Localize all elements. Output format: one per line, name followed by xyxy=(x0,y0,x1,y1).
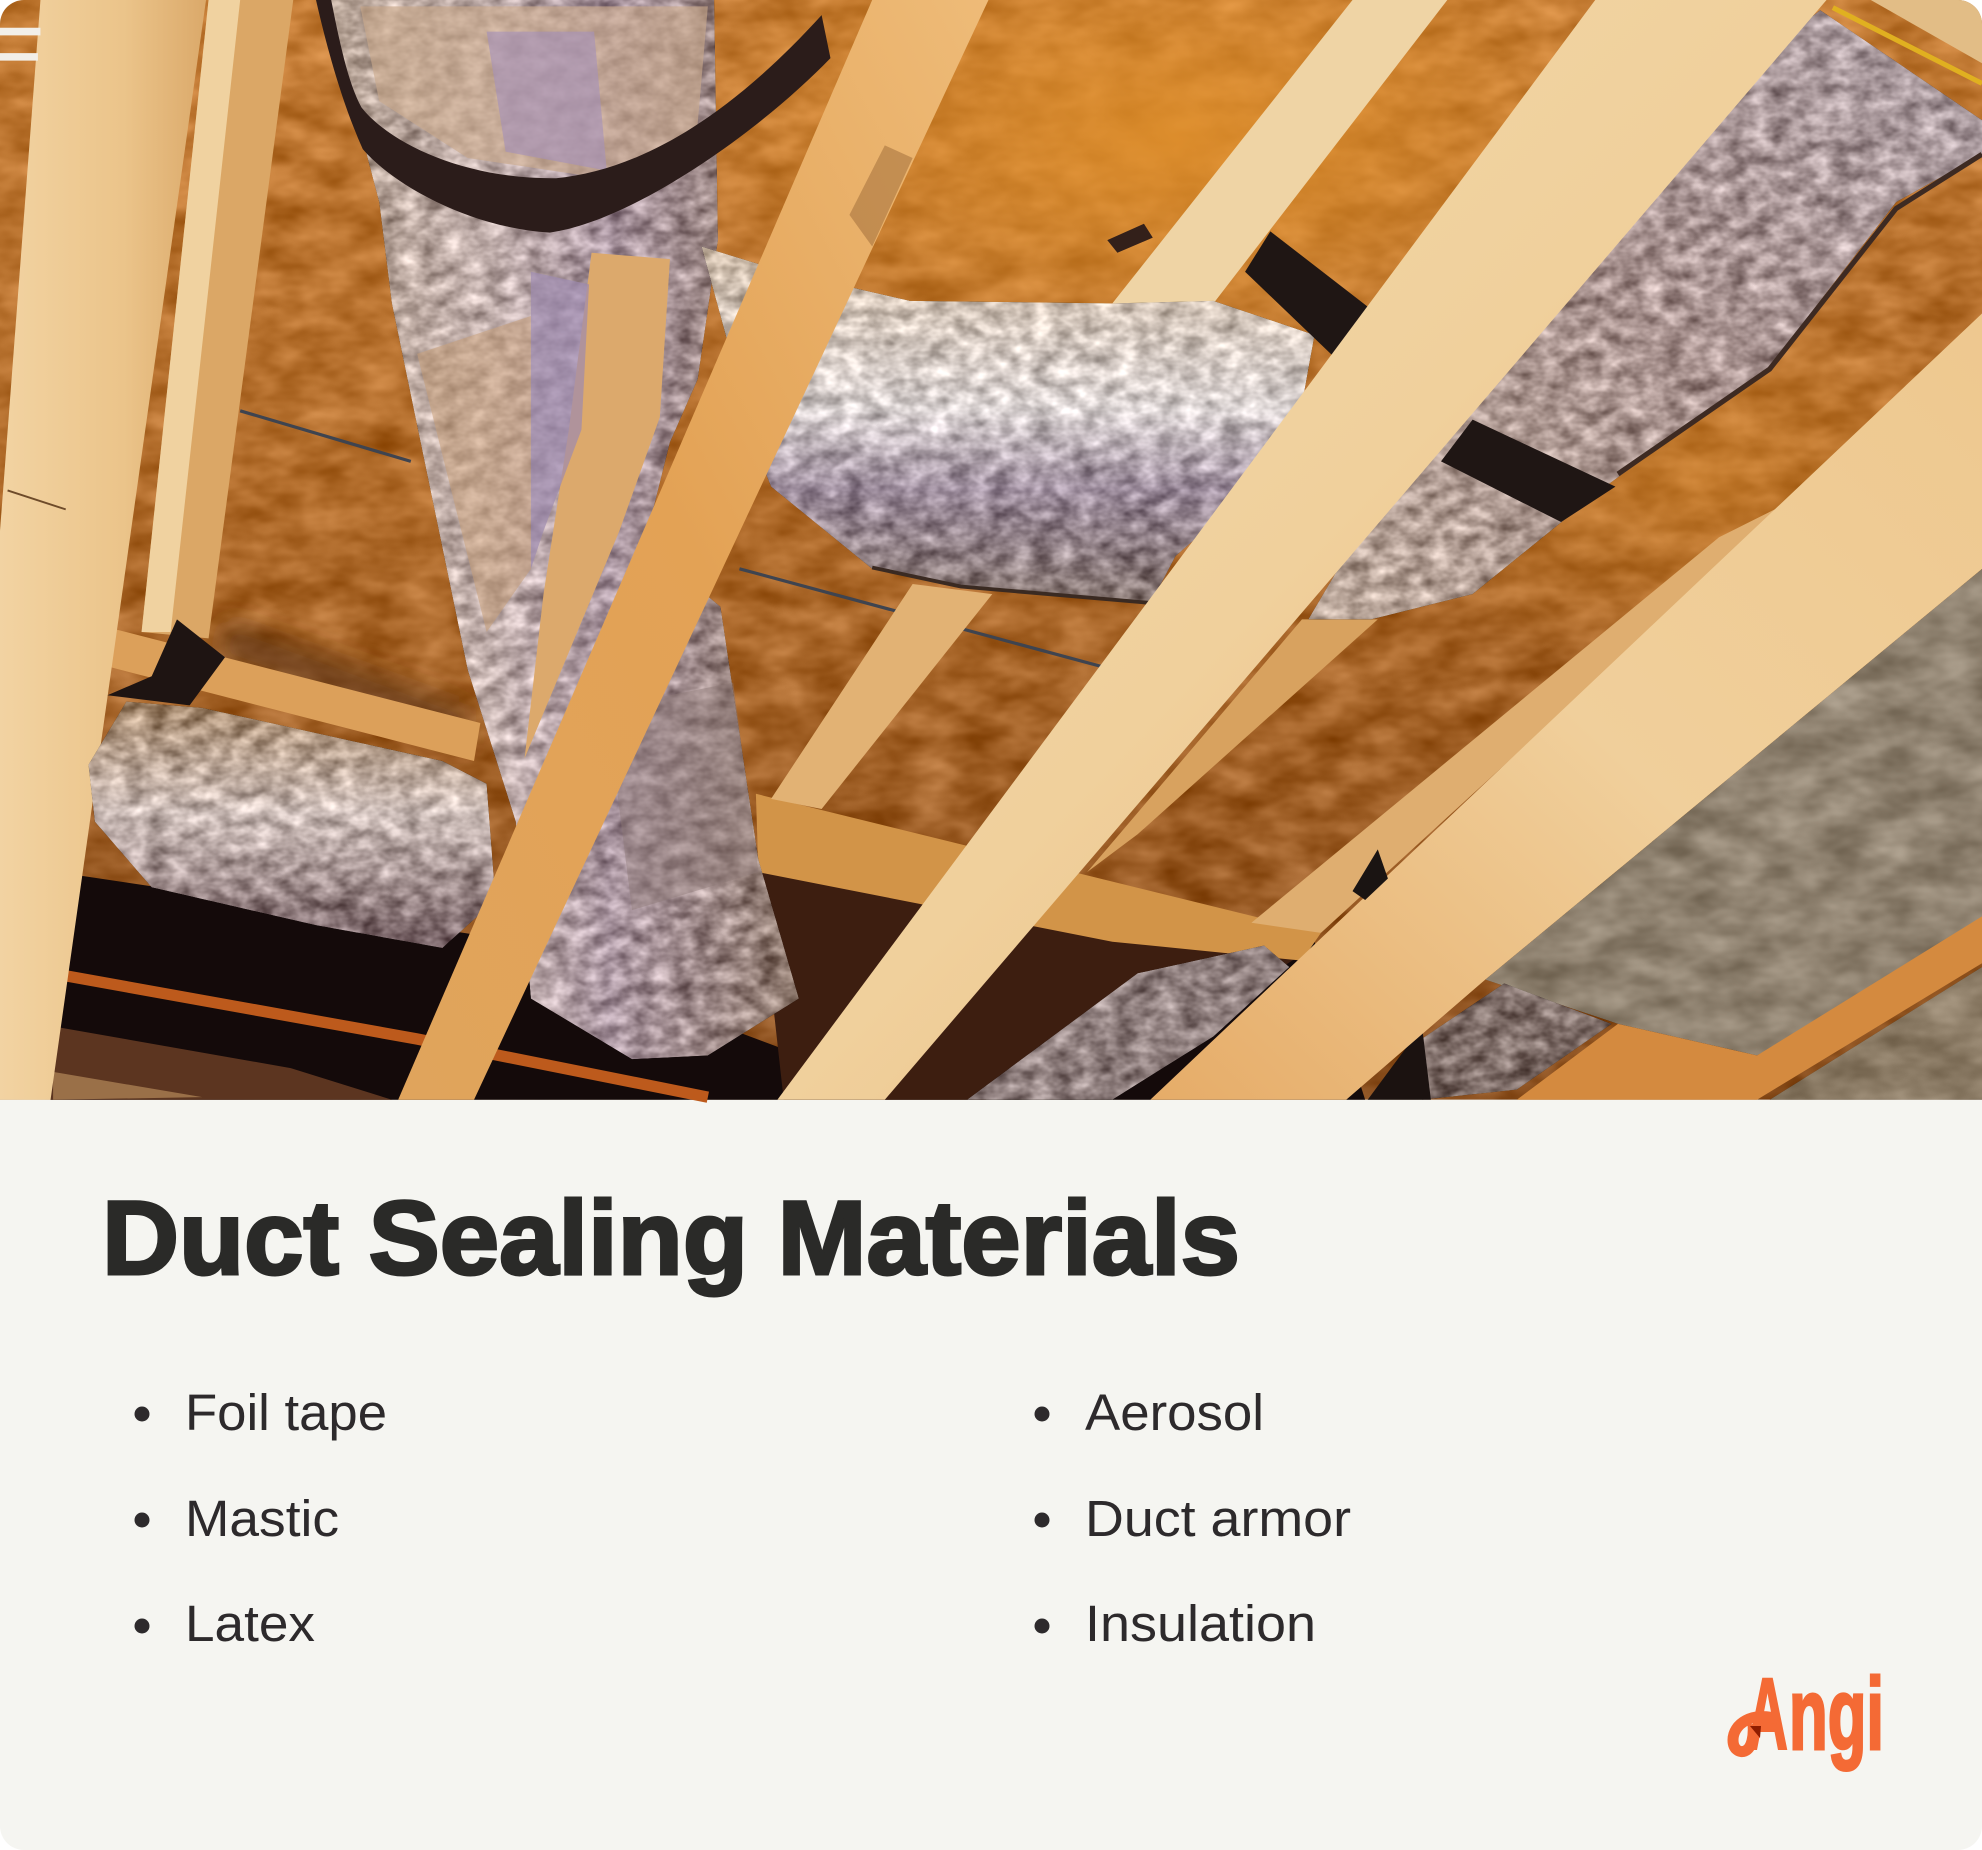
cross beams xyxy=(111,628,1321,961)
title: Duct Sealing Materials xyxy=(102,1180,1240,1297)
logo: Angi xyxy=(1733,1657,1884,1771)
logo: Angi: A xyxy=(1747,1657,1788,1771)
main centre rafter xyxy=(777,0,1827,1100)
dark cavity and orange pipe xyxy=(51,872,1365,1100)
yellow wire and top right board xyxy=(1833,0,1982,83)
panel background xyxy=(0,1100,1982,1850)
list: right column: Duct armor xyxy=(1085,1490,1351,1547)
list: left column: Mastic xyxy=(185,1490,339,1547)
logo: Angi: ngi xyxy=(1789,1657,1884,1771)
vertical duct xyxy=(326,0,799,1059)
list: right column xyxy=(1034,1384,1351,1652)
orange diagonal rafter xyxy=(398,0,988,1100)
list: left column: Foil tape xyxy=(185,1384,387,1441)
insulation batt xyxy=(1485,569,1982,1100)
lower right rafter xyxy=(1150,313,1982,1100)
left low duct xyxy=(88,619,495,948)
OSB roof sheathing xyxy=(0,0,1982,1100)
lower flex ducts xyxy=(967,945,1612,1100)
photo: foil-wrapped ducts in attic rafters xyxy=(0,0,1982,1100)
back rafters xyxy=(771,0,1795,933)
black strap on vertical duct xyxy=(316,0,830,233)
list: right column: Aerosol xyxy=(1085,1384,1264,1441)
list: right column: Insulation xyxy=(1085,1595,1316,1652)
horizontal duct xyxy=(702,246,1315,604)
left posts xyxy=(0,0,293,1100)
list: left column: Latex xyxy=(185,1595,315,1652)
black straps on right duct xyxy=(1245,231,1615,522)
list: left column xyxy=(134,1384,387,1652)
right duct xyxy=(1308,10,1982,619)
